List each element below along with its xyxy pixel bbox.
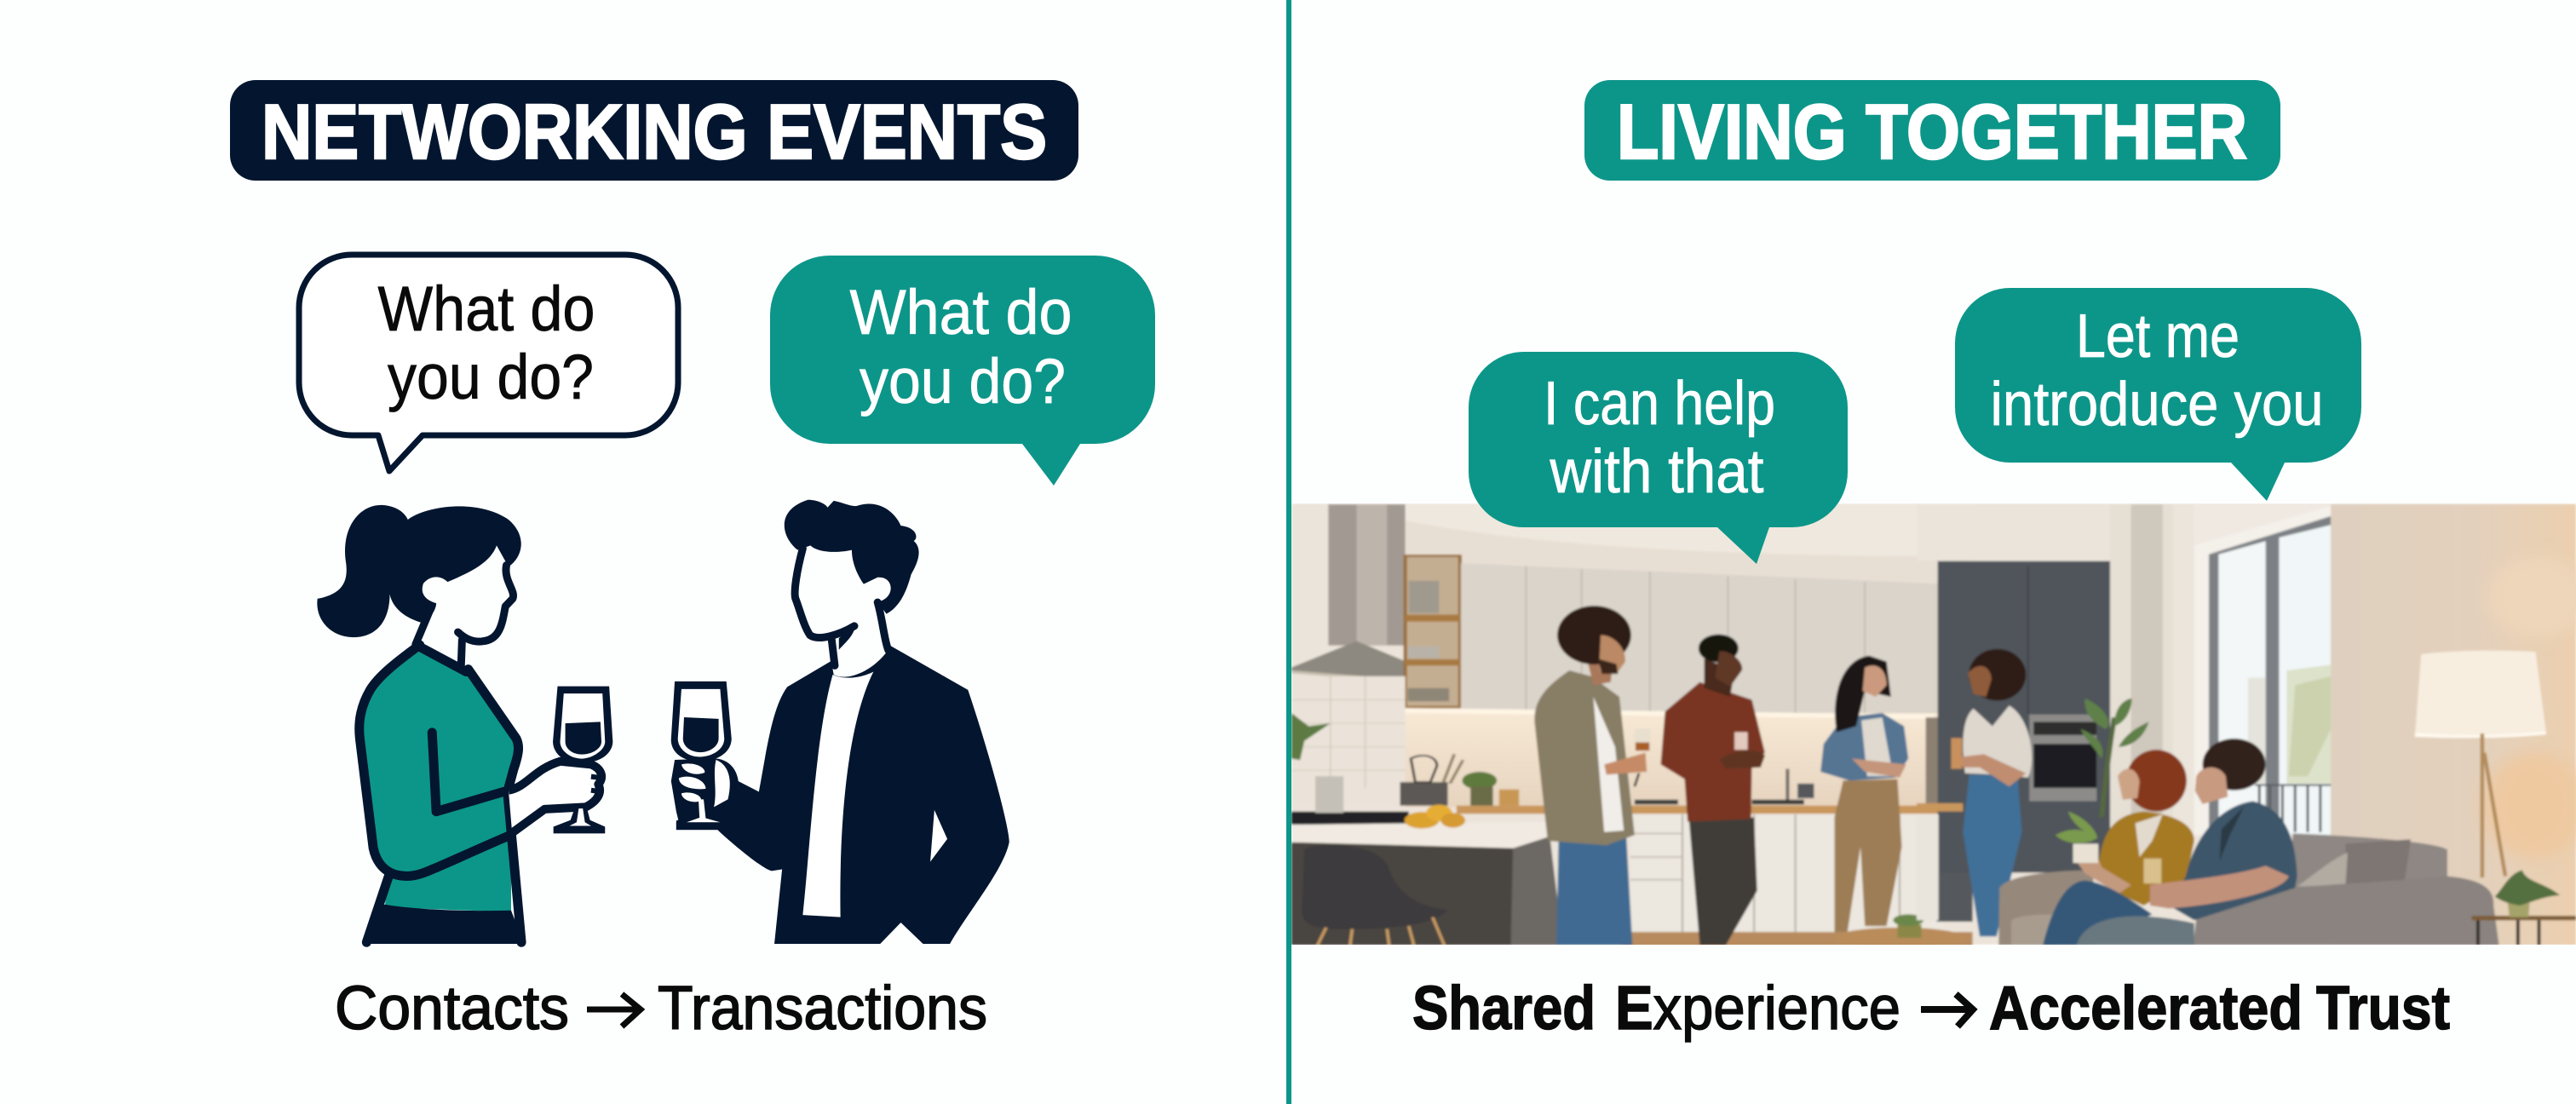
speech bubble: I can help with that: with that <box>1550 438 1763 506</box>
person: woman in denim shirt <box>1835 779 1902 932</box>
photo: kitchen and living room gathering <box>1291 503 2576 948</box>
heading: networking events: NETWORKING EVENTS <box>262 89 1047 175</box>
speech bubble: woman: you do? <box>388 342 594 412</box>
person: curly hair man <box>1556 829 1632 946</box>
illustration: man holding wine glass <box>671 500 1009 944</box>
shirt <box>358 647 516 912</box>
hair <box>317 505 521 637</box>
hair <box>785 500 919 614</box>
kitchen items <box>1291 812 1409 825</box>
living room scene <box>1917 504 2576 946</box>
speech bubble: woman <box>299 255 678 471</box>
sofa <box>2286 833 2447 888</box>
speech bubble: let me introduce you: introduce you <box>1990 371 2324 439</box>
standing woman <box>1963 774 2021 936</box>
speech bubble: I can help with that: I can help <box>1544 370 1775 438</box>
side table and plant <box>2472 916 2576 920</box>
jacket slit <box>930 810 947 862</box>
plant behind sofa <box>2102 717 2114 818</box>
caption: shared experience to accelerated trust: Shared <box>1412 975 1596 1043</box>
seated woman <box>2097 812 2194 906</box>
face and neck lines <box>416 566 514 667</box>
speech bubble: let me introduce you: Let me <box>2076 302 2240 371</box>
person: man in red shirt <box>1689 818 1757 946</box>
illustration: woman holding wine glass <box>317 505 612 944</box>
hand <box>671 758 739 824</box>
white shirt <box>802 671 873 917</box>
caption: shared experience to accelerated trust: Experience <box>1615 975 1900 1043</box>
speech bubble: man <box>770 256 1155 486</box>
speech bubble: woman: What do <box>378 273 595 344</box>
speech bubble: I can help with that <box>1469 352 1848 564</box>
speech bubble: let me introduce you <box>1955 288 2361 501</box>
jacket <box>676 644 1009 944</box>
bar stool <box>1302 845 1448 929</box>
arrow <box>587 994 641 1026</box>
divider <box>1286 0 1291 1104</box>
panel: living together <box>1291 80 2576 1043</box>
trousers <box>363 905 524 944</box>
speech bubble: man: you do? <box>860 346 1066 417</box>
caption: shared experience to accelerated trust: Accelerated <box>1989 975 2303 1043</box>
coffee table and plant <box>1847 926 1952 945</box>
caption: contacts to transactions: Transactions <box>658 975 987 1043</box>
island <box>1291 821 1409 827</box>
kitchen scene <box>1291 504 1973 948</box>
speech bubble: man: What do <box>850 277 1072 348</box>
wall and lamp <box>2331 504 2576 946</box>
heading: living together: LIVING TOGETHER <box>1617 89 2247 175</box>
forearm and hand <box>509 762 601 833</box>
seated man <box>2169 802 2297 920</box>
wine glass <box>553 687 612 762</box>
arrow <box>1921 994 1973 1026</box>
caption: shared experience to accelerated trust <box>1412 975 2450 1043</box>
wine glass <box>671 681 732 761</box>
caption: shared experience to accelerated trust: Trust <box>2316 975 2450 1043</box>
face and neck lines <box>795 549 888 665</box>
caption: contacts to transactions <box>335 975 987 1043</box>
panel: networking events <box>230 80 1155 1043</box>
outline of shirt <box>359 645 521 942</box>
caption: contacts to transactions: Contacts <box>335 975 569 1043</box>
